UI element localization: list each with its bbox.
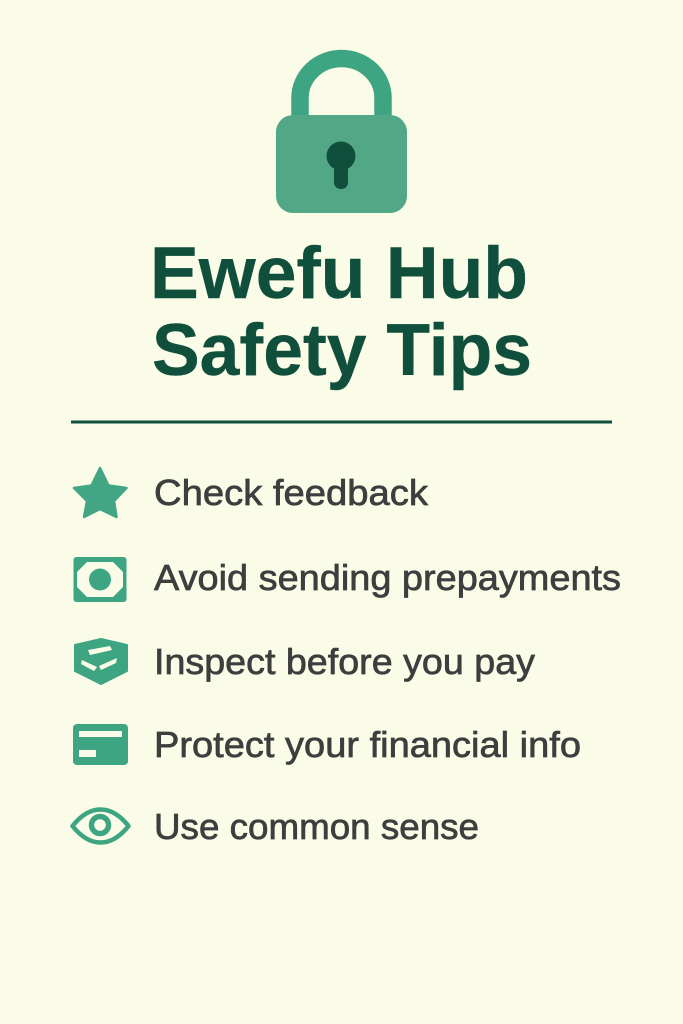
icon: banknote <box>74 557 126 602</box>
icon: package <box>75 639 127 684</box>
tip 4: protect financial info <box>73 724 581 765</box>
icon: star <box>74 468 126 517</box>
title <box>150 233 532 391</box>
tip 1: check feedback <box>74 468 429 517</box>
tip 3: inspect before paying <box>75 639 535 684</box>
icon: padlock <box>276 59 407 213</box>
tip text: inspect before you pay: Inspect before you pay <box>154 641 535 682</box>
icon: eye <box>72 810 128 842</box>
tip text: avoid prepayments: Avoid sending prepayments <box>154 557 621 598</box>
tip text: protect your financial info: Protect your financial info <box>154 724 581 765</box>
tip text: check feedback: Check feedback <box>154 472 429 513</box>
icon: credit card <box>73 724 128 765</box>
title: Safety Tips <box>152 310 532 391</box>
title: Ewefu Hub <box>150 233 528 314</box>
tip 2: avoid prepayments <box>74 557 621 602</box>
tip text: use common sense: Use common sense <box>154 806 479 847</box>
tip 5: use common sense <box>72 806 479 847</box>
